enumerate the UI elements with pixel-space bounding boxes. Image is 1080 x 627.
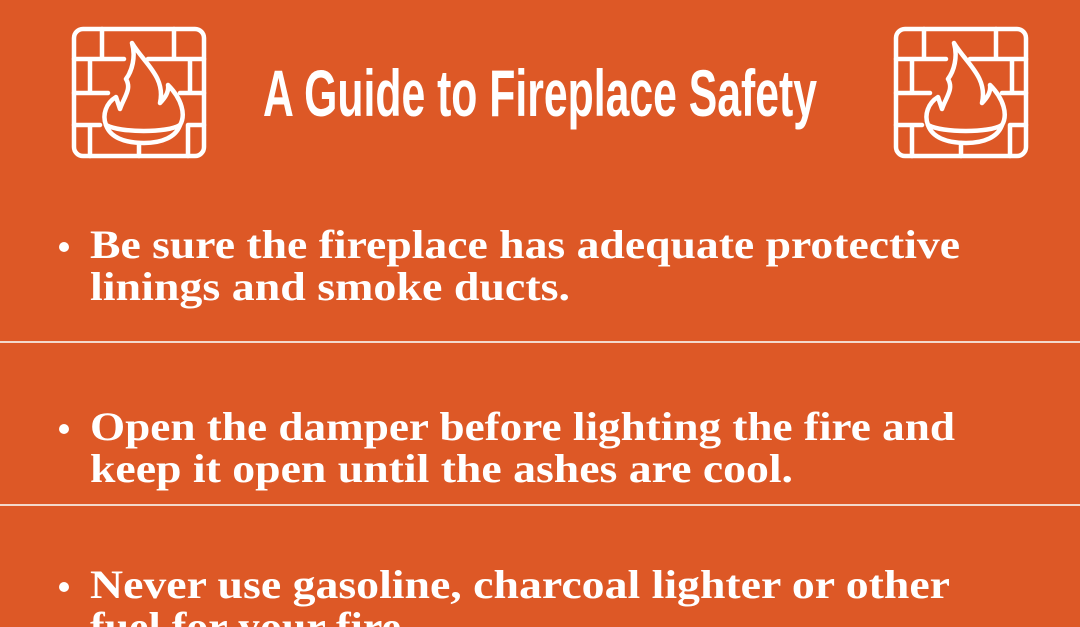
- tip 3: [59, 562, 950, 627]
- tip 2: [59, 404, 955, 491]
- tip 1: Be sure the fireplace has adequate protective: [90, 222, 960, 267]
- icon: fireplace right: [896, 29, 1026, 156]
- tip 2: keep it open until the ashes are cool.: [90, 446, 793, 491]
- icon: fireplace left: [74, 29, 204, 156]
- tip 3: Never use gasoline, charcoal lighter or other: [90, 562, 950, 607]
- tip 1: linings and smoke ducts.: [90, 264, 570, 309]
- tip 2: Open the damper before lighting the fire and: [90, 404, 955, 449]
- tip 1: [59, 222, 960, 309]
